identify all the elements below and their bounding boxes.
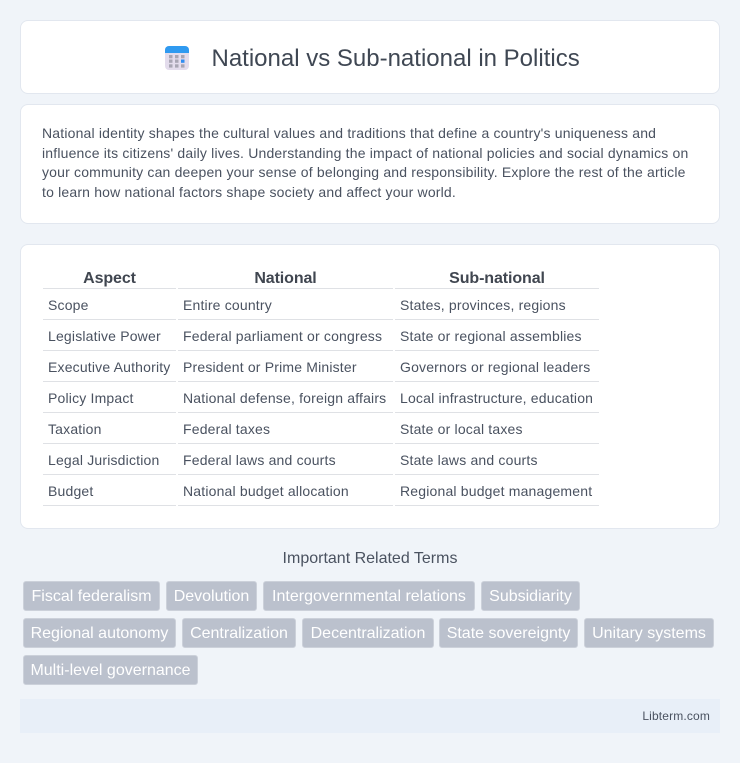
table header: Sub-national <box>449 270 545 287</box>
row: taxation <box>48 421 523 437</box>
row: executive authority: Executive Authority <box>48 359 170 375</box>
tag: Centralization <box>190 625 288 642</box>
row: executive authority <box>48 359 590 375</box>
tag: Intergovernmental relations <box>272 588 466 605</box>
tag <box>481 581 580 611</box>
tag <box>263 581 475 611</box>
row: budget <box>48 483 592 499</box>
row: budget: Budget <box>48 483 93 499</box>
intro text: National identity shapes the cultural values and traditions that define a country's uniqueness and <box>42 125 656 141</box>
intro text <box>42 125 688 200</box>
tag <box>584 618 714 648</box>
row: policy impact: National defense, foreign affairs <box>183 390 386 406</box>
footer credit: Libterm.com <box>642 709 710 723</box>
row: legislative power: Legislative Power <box>48 328 161 344</box>
tag: Devolution <box>174 588 249 605</box>
tag <box>302 618 434 648</box>
row: legislative power: Federal parliament or congress <box>183 328 382 344</box>
related terms tags <box>23 581 714 685</box>
table header: Aspect <box>83 270 136 287</box>
row: executive authority: President or Prime Minister <box>183 359 357 375</box>
row: legal jurisdiction <box>48 452 538 468</box>
intro text: influence its citizens' daily lives. Understanding the impact of national policies and social dynamics on <box>42 145 688 161</box>
footer bar <box>20 699 720 733</box>
tag: Subsidiarity <box>489 588 572 605</box>
row: legislative power: State or regional assemblies <box>400 328 582 344</box>
row: legislative power <box>48 328 582 344</box>
title: National vs Sub-national in Politics <box>212 45 580 72</box>
tag <box>23 655 198 685</box>
row: policy impact <box>48 390 593 406</box>
row: budget: Regional budget management <box>400 483 592 499</box>
comparison table panel <box>20 244 720 529</box>
header panel <box>20 20 720 94</box>
row: executive authority: Governors or regional leaders <box>400 359 590 375</box>
row: budget: National budget allocation <box>183 483 349 499</box>
row: scope <box>48 297 566 313</box>
table header: National <box>254 270 317 287</box>
row: scope: Entire country <box>183 297 272 313</box>
icon: calendar <box>165 46 189 70</box>
row: scope: States, provinces, regions <box>400 297 566 313</box>
tag <box>23 581 160 611</box>
row: taxation: Taxation <box>48 421 102 437</box>
tag: Regional autonomy <box>31 625 168 642</box>
intro text: to learn how national factors shape society and affect your world. <box>42 184 456 200</box>
row: policy impact: Policy Impact <box>48 390 134 406</box>
intro panel <box>20 104 720 224</box>
tag: Unitary systems <box>592 625 706 642</box>
tag: Fiscal federalism <box>31 588 152 605</box>
row: legal jurisdiction: State laws and courts <box>400 452 538 468</box>
tag <box>439 618 578 648</box>
tag <box>166 581 257 611</box>
row: legal jurisdiction: Federal laws and courts <box>183 452 336 468</box>
row: legal jurisdiction: Legal Jurisdiction <box>48 452 159 468</box>
tag: State sovereignty <box>447 625 570 642</box>
intro text: your community can deepen your sense of belonging and responsibility. Explore the rest of the article <box>42 164 686 180</box>
tag <box>23 618 176 648</box>
row: scope: Scope <box>48 297 89 313</box>
row: taxation: State or local taxes <box>400 421 523 437</box>
tag <box>182 618 296 648</box>
row: policy impact: Local infrastructure, education <box>400 390 593 406</box>
row: taxation: Federal taxes <box>183 421 270 437</box>
table header <box>83 270 545 287</box>
tag: Multi-level governance <box>30 662 191 679</box>
tag: Decentralization <box>311 625 425 642</box>
related terms heading: Important Related Terms <box>283 550 457 567</box>
